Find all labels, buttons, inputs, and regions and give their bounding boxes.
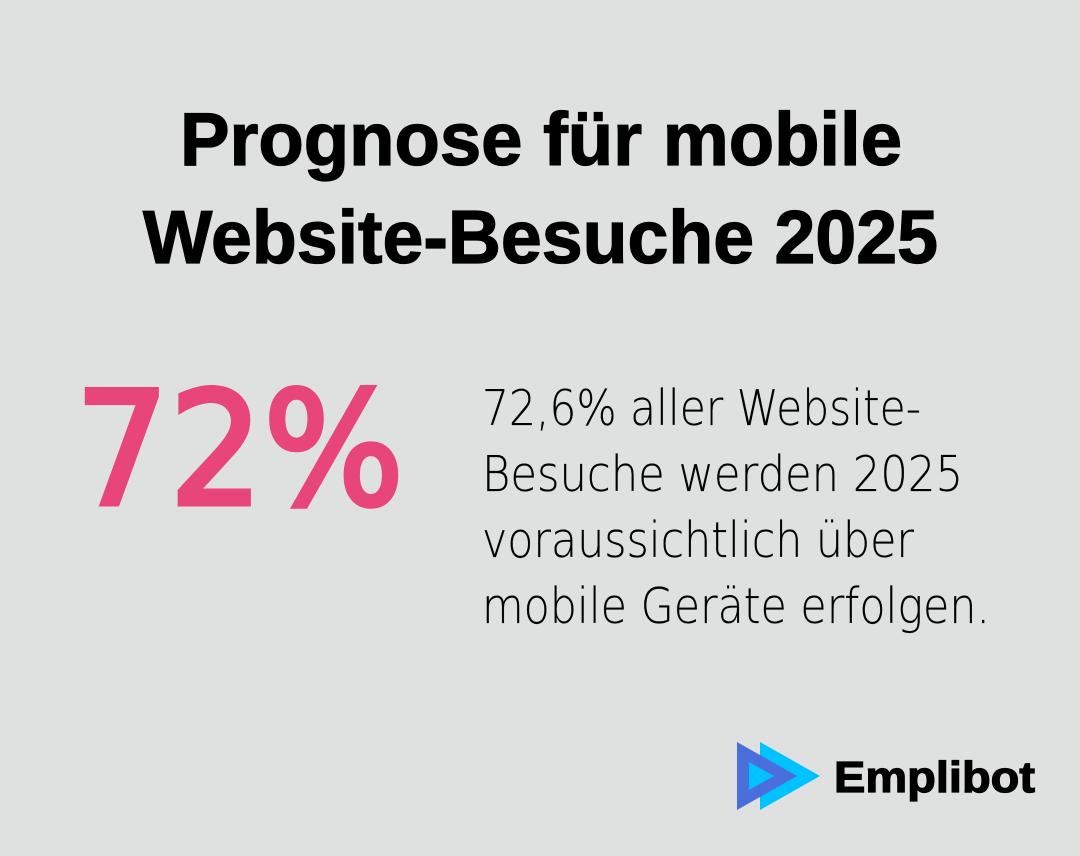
logo: Emplibot [737,742,1035,810]
title [143,97,938,279]
description text: Besuche werden 2025 [482,446,963,503]
icon: play triangles [737,742,820,810]
description text: voraussichtlich über [482,512,915,569]
description text [482,380,990,635]
title: Website-Besuche 2025 [143,195,938,279]
description text: mobile Geräte erfolgen. [482,578,990,635]
big statistic: 72%: 72% [75,359,404,542]
logo wordmark: Emplibot [834,753,1035,802]
title: Prognose für mobile [180,97,902,181]
description text: 72,6% aller Website- [482,380,921,437]
